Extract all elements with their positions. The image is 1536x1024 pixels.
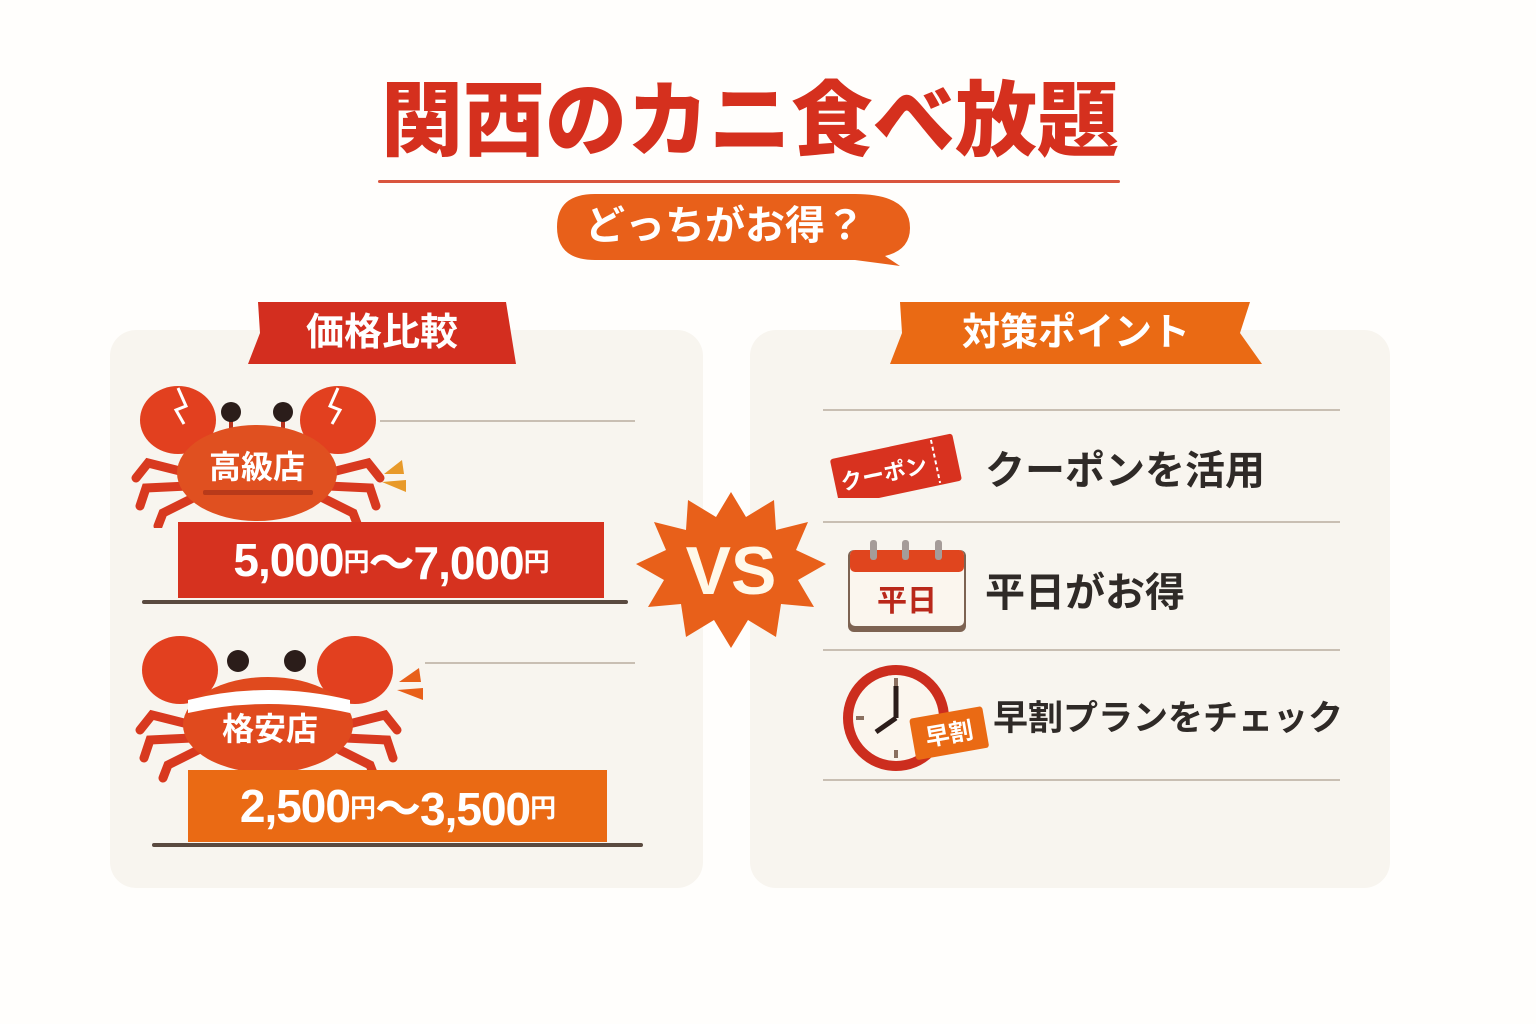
subtitle bubble bbox=[557, 194, 910, 266]
accent marks bbox=[382, 460, 406, 492]
text: early plan: 早割プランをチェック bbox=[993, 699, 1343, 738]
price bar: cheap: 円 bbox=[350, 792, 375, 822]
icon: coupon: クーポン bbox=[838, 453, 930, 495]
icon: clock with early discount tag bbox=[843, 665, 989, 771]
VS starburst bbox=[636, 492, 826, 648]
VS starburst: VS bbox=[686, 533, 776, 609]
price bar: high: 円 bbox=[524, 546, 549, 576]
icon: crab 格安店 bbox=[136, 636, 402, 782]
accent marks 2 bbox=[397, 668, 423, 700]
price bar: high: 5,000 〜7,000 bbox=[233, 534, 524, 589]
tag: 対策ポイント: 対策ポイント bbox=[962, 312, 1190, 354]
price bar: cheap: 円 bbox=[530, 792, 555, 822]
icon: crab 格安店: 格安店 bbox=[222, 711, 318, 747]
icon: clock with early discount tag: 早割 bbox=[923, 717, 975, 752]
icon: coupon bbox=[830, 434, 962, 498]
icon: calendar bbox=[848, 540, 966, 632]
price bar: high bbox=[178, 522, 604, 598]
subtitle bubble: どっちがお得？ bbox=[585, 204, 865, 248]
price bar: cheap bbox=[188, 770, 607, 842]
panel: price comparison bbox=[110, 330, 703, 888]
tag: 価格比較 bbox=[248, 302, 516, 364]
price bar: high: 円 bbox=[343, 546, 368, 576]
panel: tips bbox=[750, 330, 1390, 888]
text: coupon: クーポンを活用 bbox=[985, 449, 1265, 493]
title: 関西のカニ食べ放題 bbox=[381, 76, 1119, 167]
icon: calendar: 平日 bbox=[877, 585, 937, 618]
text: weekday: 平日がお得 bbox=[985, 571, 1185, 615]
icon: crab 高級店: 高級店 bbox=[209, 449, 305, 485]
price bar: cheap: 2,500 〜3,500 bbox=[240, 780, 530, 835]
tag: 価格比較: 価格比較 bbox=[306, 312, 458, 354]
tag: 対策ポイント bbox=[890, 302, 1262, 364]
icon: crab 高級店 bbox=[132, 386, 384, 528]
